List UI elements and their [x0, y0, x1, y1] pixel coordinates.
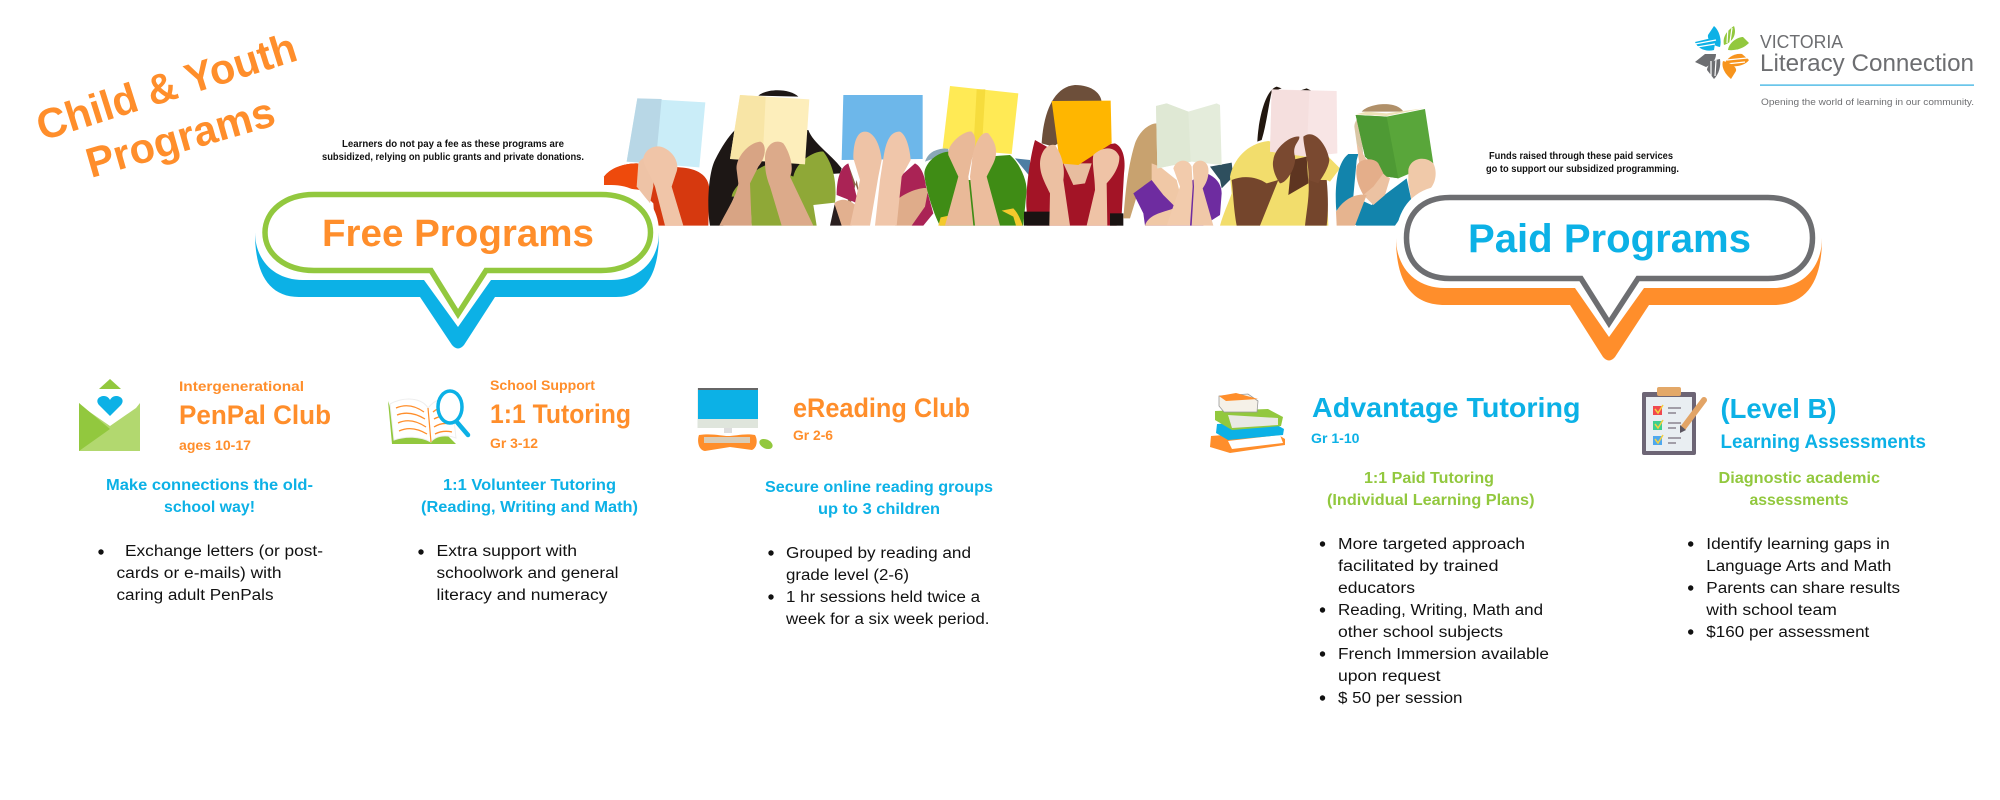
note: paid programs funding: Funds raised through these paid services — [1489, 151, 1673, 162]
note: paid programs funding — [1486, 151, 1679, 175]
logo: Victoria Literacy Connection — [1695, 26, 1974, 108]
panel: 1:1 Tutoring: 1:1 Volunteer Tutoring — [443, 477, 616, 494]
panel: Level B Learning Assessments: Learning Assessments — [1720, 432, 1926, 453]
callout: Paid Programs — [1396, 186, 1822, 360]
panel: 1:1 Tutoring: (Reading, Writing and Math) — [421, 499, 638, 516]
panel: eReading Club: eReading Club — [793, 393, 970, 423]
panel: 1:1 Tutoring — [388, 377, 638, 604]
callout: Free Programs: Free Programs — [322, 213, 594, 255]
panel: Advantage Tutoring: Reading, Writing, Math and — [1338, 602, 1543, 619]
panel: PenPal Club: Make connections the old- — [106, 477, 313, 494]
panel: eReading Club: Secure online reading groups — [765, 479, 993, 496]
panel: 1:1 Tutoring: School Support — [490, 377, 595, 393]
panel: eReading Club: week for a six week period. — [785, 611, 990, 628]
panel: Advantage Tutoring: Gr 1-10 — [1311, 430, 1360, 446]
panel: Advantage Tutoring — [1210, 392, 1580, 707]
panel: PenPal Club: school way! — [164, 499, 255, 516]
panel: Level B Learning Assessments: Diagnostic academic — [1718, 470, 1880, 487]
panel: eReading Club: grade level (2-6) — [786, 567, 909, 584]
photo: children reading with books covering faces — [604, 85, 1436, 226]
logo: Victoria Literacy Connection: Literacy Connection — [1760, 50, 1974, 77]
panel: Advantage Tutoring: educators — [1338, 580, 1415, 597]
panel: Level B Learning Assessments: Language Arts and Math — [1706, 558, 1891, 575]
panel: Level B Learning Assessments: $160 per assessment — [1706, 624, 1870, 641]
panel: 1:1 Tutoring: literacy and numeracy — [436, 587, 608, 604]
panel: Level B Learning Assessments: Parents can share results — [1706, 580, 1900, 597]
panel: Advantage Tutoring: upon request — [1338, 668, 1441, 685]
panel: Level B Learning Assessments: assessments — [1750, 492, 1848, 509]
note: paid programs funding: go to support our subsidized programming. — [1486, 164, 1679, 175]
panel: eReading Club: Grouped by reading and — [786, 545, 971, 562]
panel: eReading Club: Gr 2-6 — [793, 427, 833, 443]
panel: Advantage Tutoring: Advantage Tutoring — [1312, 392, 1580, 423]
callout: Paid Programs: Paid Programs — [1468, 217, 1751, 261]
callout: Free Programs — [255, 185, 659, 348]
panel: Advantage Tutoring: facilitated by trained — [1338, 558, 1498, 575]
note: free programs funding: Learners do not pay a fee as these programs are — [342, 139, 564, 150]
panel: PenPal Club: PenPal Club — [179, 400, 331, 430]
title: Child & Youth Programs: Programs — [81, 88, 280, 187]
panel: 1:1 Tutoring: schoolwork and general — [436, 565, 618, 582]
panel: PenPal Club: caring adult PenPals — [116, 587, 274, 604]
panel: 1:1 Tutoring: 1:1 Tutoring — [490, 399, 631, 429]
note: free programs funding — [322, 139, 584, 163]
panel: Level B Learning Assessments: (Level B) — [1720, 393, 1836, 424]
panel: Level B Learning Assessments — [1642, 387, 1926, 641]
icon: clipboard with pencil — [1642, 387, 1704, 455]
logo: Victoria Literacy Connection: Opening the world of learning in our community. — [1761, 97, 1974, 108]
panel: PenPal Club: cards or e-mails) with — [116, 565, 282, 582]
panel: Advantage Tutoring: More targeted approach — [1338, 536, 1525, 553]
note: free programs funding: subsidized, relying on public grants and private donations. — [322, 152, 584, 163]
panel: 1:1 Tutoring: Gr 3-12 — [490, 435, 538, 451]
panel: Advantage Tutoring: 1:1 Paid Tutoring — [1364, 470, 1494, 487]
panel: eReading Club — [698, 388, 993, 628]
panel: PenPal Club: ages 10-17 — [179, 437, 251, 453]
icon: computer with keyboard and mouse — [698, 388, 774, 451]
panel: 1:1 Tutoring: Extra support with — [436, 543, 577, 560]
panel: Level B Learning Assessments: with school team — [1705, 602, 1837, 619]
panel: eReading Club: up to 3 children — [818, 501, 940, 518]
panel: PenPal Club: Intergenerational — [179, 378, 304, 394]
panel: Level B Learning Assessments: Identify learning gaps in — [1706, 536, 1890, 553]
panel: Advantage Tutoring: (Individual Learning Plans) — [1327, 492, 1534, 509]
icon: stack of books — [1210, 393, 1285, 453]
panel: Advantage Tutoring: French Immersion available — [1338, 646, 1549, 663]
panel: PenPal Club: Exchange letters (or post- — [125, 543, 323, 560]
panel: Advantage Tutoring: other school subjects — [1338, 624, 1503, 641]
icon: open book with magnifier — [388, 391, 468, 444]
icon: envelope with heart — [79, 379, 140, 451]
panel: eReading Club: 1 hr sessions held twice a — [786, 589, 980, 606]
panel: PenPal Club — [79, 378, 331, 604]
title: Child & Youth Programs: Child & Youth — [31, 24, 302, 150]
panel: Advantage Tutoring: $ 50 per session — [1338, 690, 1462, 707]
icon: four-colour leaves — [1695, 26, 1749, 79]
logo: Victoria Literacy Connection: VICTORIA — [1760, 32, 1843, 52]
